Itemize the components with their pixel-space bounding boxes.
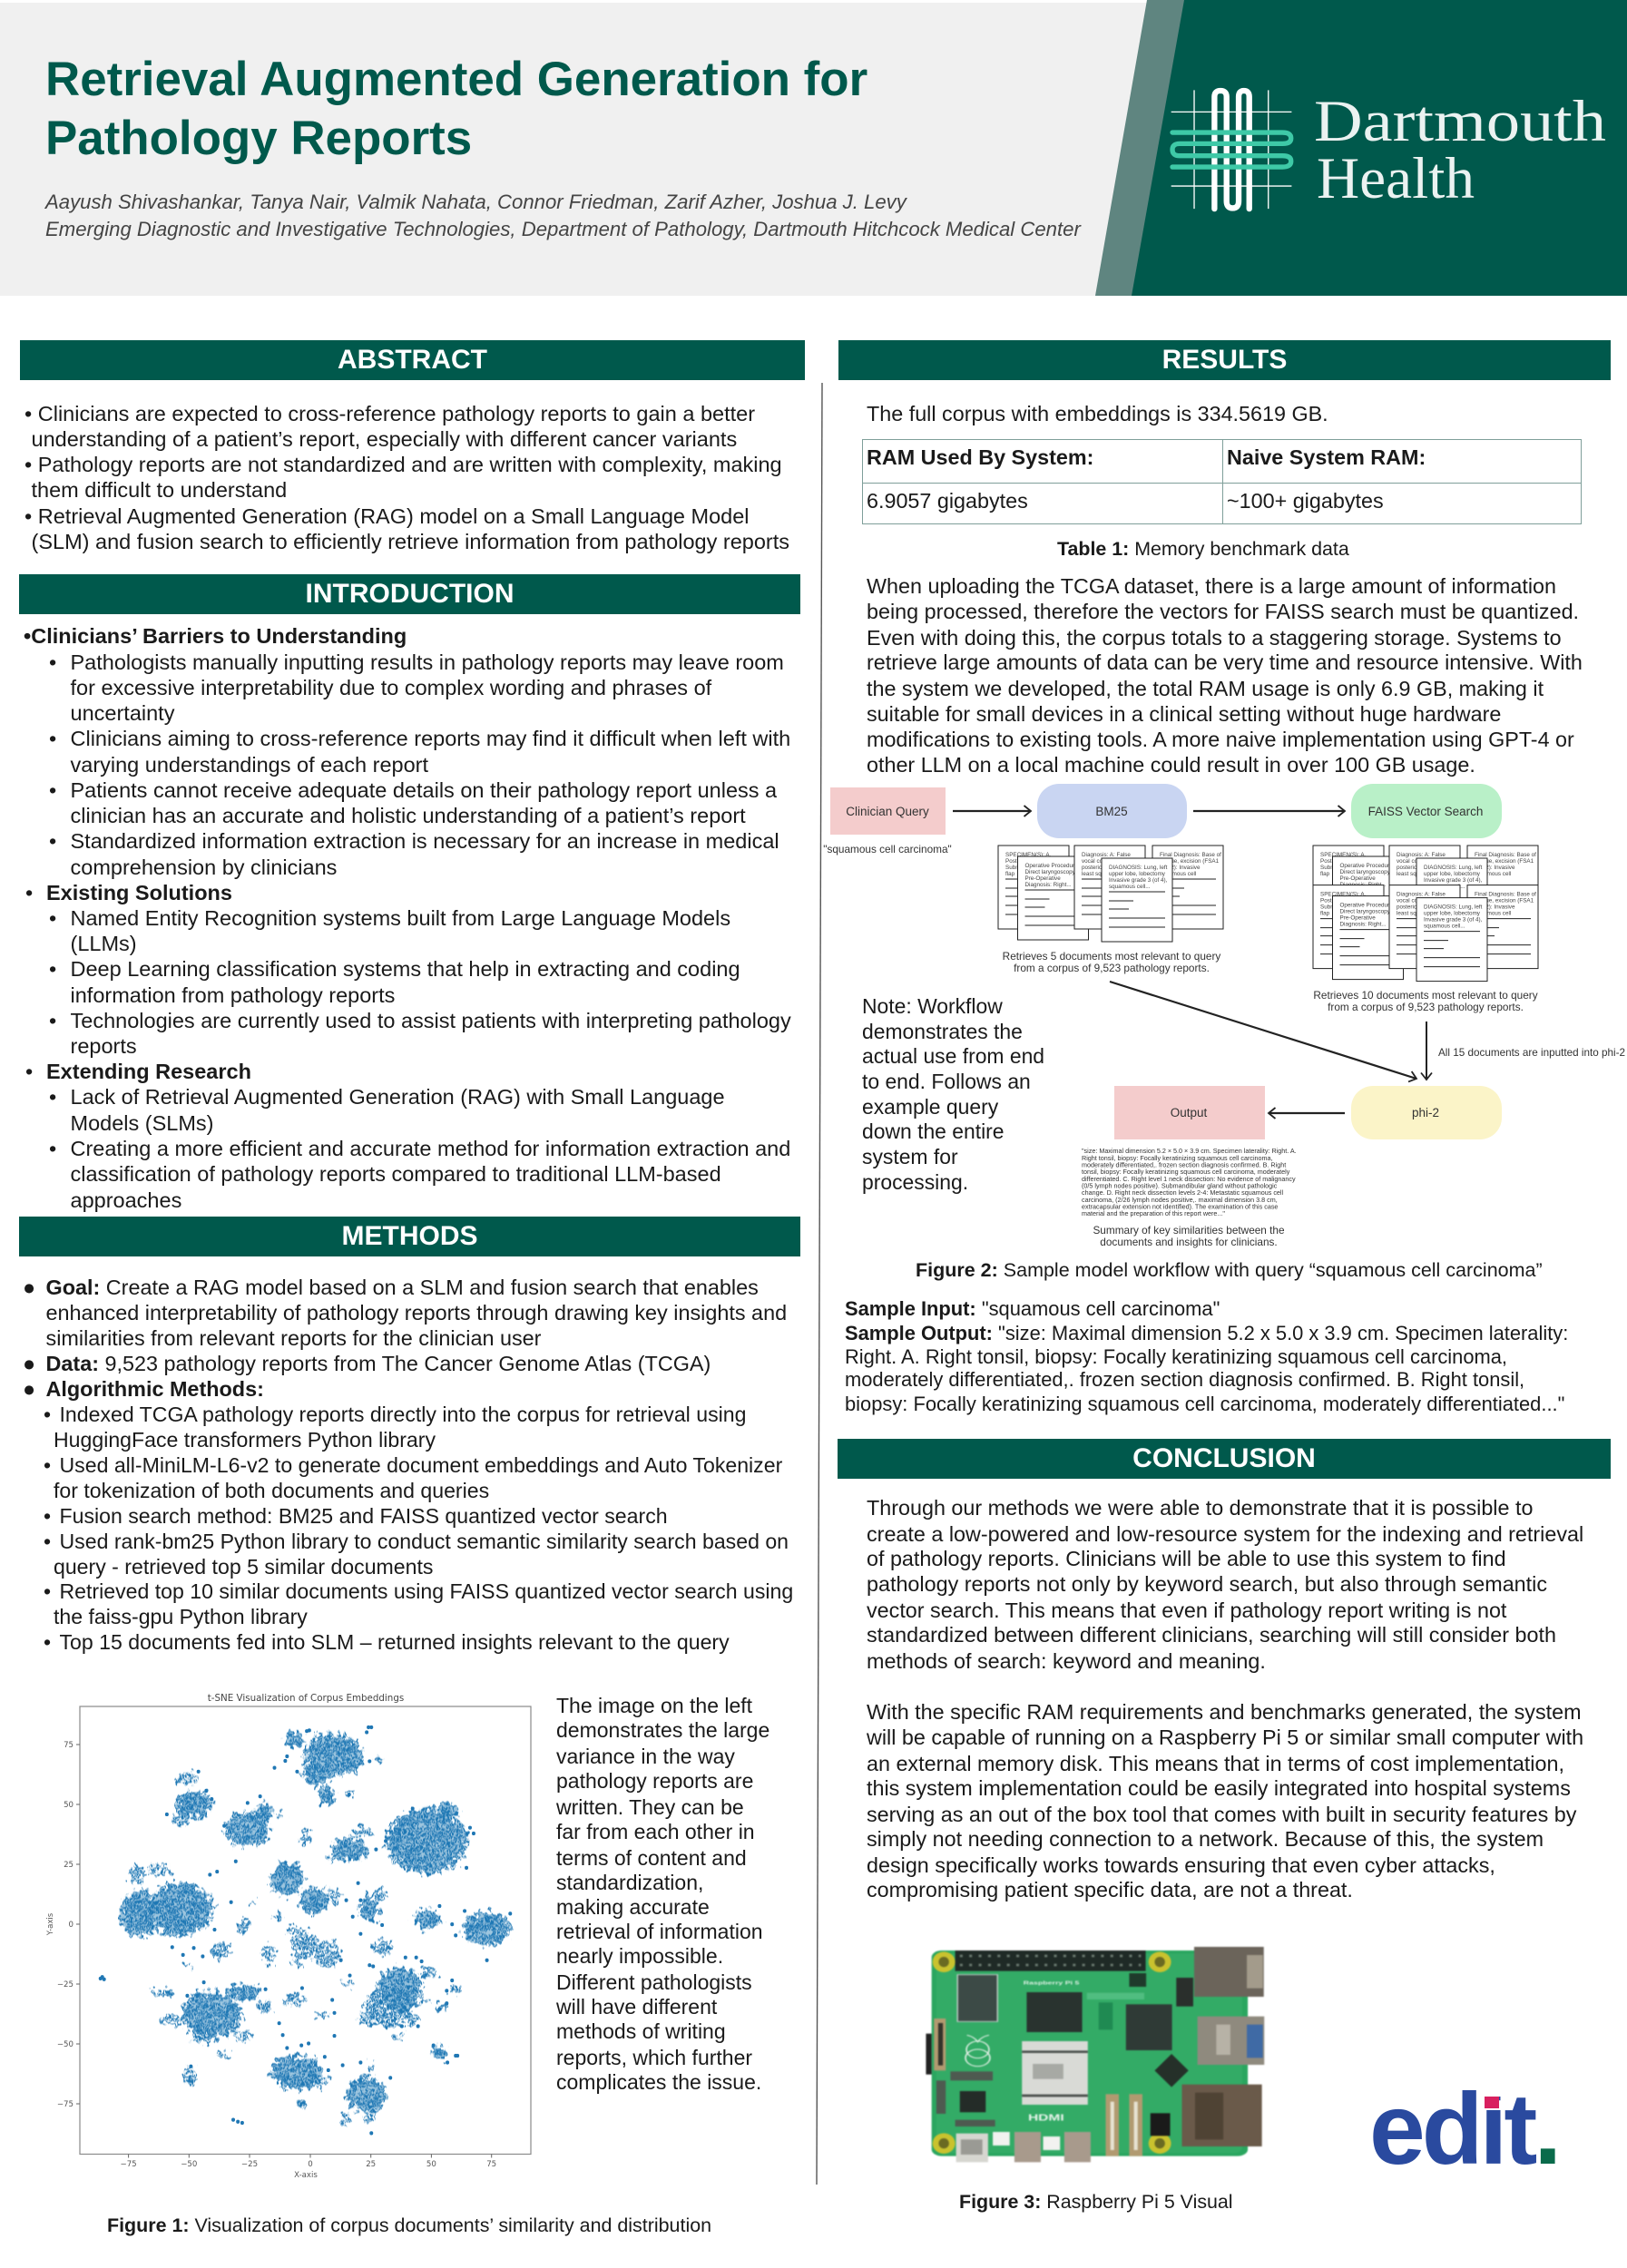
documents retrieved by BM25: DIAGNOSIS: Lung, left — [1109, 865, 1168, 871]
methods text: Indexed TCGA pathology reports directly into the corpus for retrieval using — [60, 1403, 746, 1426]
node: clinician query: Clinician Query — [846, 805, 929, 818]
documents retrieved by FAISS: squamous cell... — [1424, 924, 1465, 930]
documents retrieved by FAISS: squamous cell... — [1424, 884, 1465, 890]
arrow: phi-2 to output — [1269, 1112, 1345, 1114]
documents retrieved by FAISS: upper lobe, lobectomy — [1424, 871, 1481, 877]
introduction text — [24, 624, 791, 1212]
documents retrieved by FAISS: flap — [1320, 911, 1330, 917]
documents retrieved by FAISS: posterior, excision — [1397, 904, 1443, 911]
table caption: Table 1: Memory benchmark data — [1057, 538, 1349, 560]
documents retrieved by FAISS: Submandibular — [1320, 904, 1358, 911]
pink i-dot — [1485, 2097, 1499, 2108]
heading: results: RESULTS — [1162, 345, 1287, 375]
introduction text: Standardized information extraction is necessary for an increase in medical — [71, 829, 779, 853]
workflow note: demonstrates the — [862, 1020, 1023, 1043]
conclusion text: methods of search: keyword and meaning. — [867, 1649, 1266, 1673]
documents retrieved by FAISS: Operative Procedure: — [1339, 863, 1395, 869]
documents retrieved by FAISS: Diagnosis: Right... — [1339, 882, 1387, 888]
chart description text — [556, 1694, 769, 2094]
table header: naive RAM: Naive System RAM: — [1227, 445, 1426, 469]
documents retrieved by FAISS: squamous cell — [1475, 911, 1511, 917]
conclusion text: compromising patient specific data, are not a threat. — [867, 1878, 1353, 1901]
documents retrieved by BM25: flap — [1005, 871, 1015, 877]
node: output — [1114, 1086, 1265, 1139]
figure 1 caption: Figure 1: Visualization of corpus documents’ similarity and distribution — [107, 2214, 711, 2236]
introduction text: • — [49, 650, 56, 674]
axis labels: 50 — [426, 2160, 436, 2169]
introduction text: Pathologists manually inputting results in pathology reports may leave room — [71, 650, 784, 674]
methods text: • — [44, 1504, 51, 1528]
documents retrieved by BM25: Diagnosis: A: False — [1082, 852, 1131, 858]
white gap above i-dot — [1479, 2085, 1501, 2097]
documents retrieved by FAISS: SPECIMEN(S): A. — [1320, 852, 1367, 858]
USB-C and micro-HDMI ports — [956, 2134, 988, 2162]
documents retrieved by BM25: squamous cell... — [1109, 884, 1151, 890]
title — [45, 53, 867, 165]
image: Raspberry Pi 5 board — [925, 1946, 1265, 2163]
chart description text: nearly impossible. — [556, 1944, 723, 1968]
documents retrieved by FAISS: Posterior — [1320, 898, 1343, 904]
introduction text: uncertainty — [71, 701, 174, 725]
results paragraph — [867, 574, 1583, 777]
arrow: query to BM25 — [953, 810, 1031, 812]
documents retrieved by BM25: Invasive grade 3 (of 4), — [1109, 877, 1168, 884]
introduction text: approaches — [71, 1188, 181, 1212]
introduction text: Deep Learning classification systems that help in extracting and coding — [71, 957, 740, 981]
chart description text: reports, which further — [556, 2046, 752, 2069]
introduction text: • — [49, 1085, 56, 1109]
documents retrieved by BM25: least squamous — [1082, 871, 1122, 877]
introduction text: • — [49, 778, 56, 802]
heading: introduction — [19, 574, 800, 614]
output sample text: change. D. Right neck dissection levels 2-4: Metastatic squamous cell — [1082, 1188, 1284, 1197]
methods text: • — [44, 1453, 51, 1477]
methods text: • — [44, 1530, 51, 1553]
results paragraph: Even with doing this, the corpus totals to a staggering storage. Systems to — [867, 626, 1562, 650]
conclusion text: Through our methods we were able to demonstrate that it is possible to — [867, 1496, 1533, 1520]
documents retrieved by FAISS: Invasive grade 3 (of 4), — [1424, 877, 1483, 884]
heading: results — [838, 340, 1611, 380]
node: FAISS vector search — [1351, 784, 1502, 838]
chart description text: The image on the left — [556, 1694, 752, 1717]
workflow note: example query — [862, 1095, 998, 1119]
workflow note: down the entire — [862, 1119, 1005, 1143]
workflow note: to end. Follows an — [862, 1070, 1031, 1093]
scatter points — [101, 1727, 511, 2133]
chart description text: standardization, — [556, 1871, 703, 1894]
axis labels: −50 — [181, 2160, 197, 2169]
documents retrieved by FAISS: Invasive grade 3 (of 4), — [1424, 917, 1483, 924]
chart description text: complicates the issue. — [556, 2070, 761, 2094]
conclusion text: standardized between different clinicians, searching will still consider both — [867, 1623, 1556, 1647]
documents retrieved by FAISS: Final Diagnosis: Base of — [1475, 852, 1536, 858]
sample input and output: Sample Output: "size: Maximal dimension 5.2 x 5.0 x 3.9 cm. Specimen laterality: — [845, 1322, 1568, 1344]
conclusion text: an external memory disk. This means that in terms of cost implementation, — [867, 1752, 1564, 1775]
heading: abstract: ABSTRACT — [338, 345, 487, 375]
introduction text: classification of pathology reports compared to traditional LLM-based — [71, 1162, 721, 1186]
methods text: Retrieved top 10 similar documents using FAISS quantized vector search using — [60, 1579, 793, 1603]
axis labels: 50 — [64, 1801, 74, 1810]
results paragraph: being processed, therefore the vectors for FAISS search must be quantized. — [867, 600, 1579, 623]
workflow note: actual use from end — [862, 1044, 1044, 1068]
sample input and output: moderately differentiated,. frozen section diagnosis confirmed. B. Right tonsil, — [845, 1368, 1524, 1391]
introduction text: • — [25, 881, 33, 904]
methods text: query - retrieved top 5 similar documents — [54, 1555, 433, 1579]
chart description text: will have different — [556, 1995, 717, 2019]
axis labels: −50 — [57, 2040, 74, 2049]
conclusion text: create a low-powered and low-resource system for the indexing and retrieval — [867, 1522, 1583, 1546]
conclusion text: design specifically works towards ensuring that even cyber attacks, — [867, 1853, 1495, 1877]
table value: naive RAM: ~100+ gigabytes — [1227, 489, 1384, 513]
figure 3 caption: Figure 3: Raspberry Pi 5 Visual — [959, 2191, 1233, 2213]
abstract text: them difficult to understand — [31, 478, 287, 502]
output sample text: differentiated. C. Right level 1 neck dissection: No evidence of malignancy — [1082, 1175, 1296, 1183]
node: output: Output — [1171, 1106, 1208, 1119]
output sample text: material and the preparation of this report were..." — [1082, 1209, 1225, 1217]
output sample text: extracapsular extension not identified). The examination of this case — [1082, 1203, 1278, 1210]
documents retrieved by FAISS: Diagnosis: A: False — [1397, 852, 1446, 858]
chips — [957, 1975, 997, 2021]
chart description text: written. They can be — [556, 1795, 744, 1819]
abstract text: understanding of a patient’s report, especially with different cancer variants — [31, 427, 737, 451]
results paragraph: retrieve large amounts of data can be very time and resource intensive. With — [867, 650, 1583, 674]
conclusion text: simply not needing connection to a network. Because of this, the system — [867, 1827, 1544, 1851]
arrow label: All 15 documents are inputted into phi-2 — [1438, 1047, 1625, 1059]
axis labels: 25 — [64, 1861, 74, 1870]
documents retrieved by FAISS: Direct laryngoscopy; — [1339, 909, 1392, 915]
title: Pathology Reports — [45, 112, 472, 165]
introduction text: • — [25, 1060, 33, 1083]
methods text: Used all-MiniLM-L6-v2 to generate document embeddings and Auto Tokenizer — [60, 1453, 782, 1477]
introduction text: Existing Solutions — [46, 881, 232, 904]
documents retrieved by FAISS: Pre-Operative — [1339, 875, 1376, 882]
documents retrieved by BM25: posterior, excision — [1082, 865, 1128, 871]
documents retrieved by FAISS: Pre-Operative — [1339, 915, 1376, 922]
output sample text: Right tonsil, biopsy: Focally keratinizing squamous cell carcinoma, — [1082, 1154, 1273, 1162]
results paragraph: other LLM on a local machine could result in over 100 GB usage. — [867, 753, 1475, 777]
conclusion text — [867, 1496, 1583, 1901]
output sample text: (0/5 lymph nodes positive). Submandibular gland without pathologic — [1082, 1181, 1278, 1190]
documents retrieved by FAISS: Posterior — [1320, 858, 1343, 865]
introduction text: Extending Research — [46, 1060, 251, 1083]
methods text — [23, 1276, 793, 1654]
header banner — [0, 0, 1627, 296]
heading: introduction: INTRODUCTION — [305, 579, 514, 609]
chart description text: terms of content and — [556, 1846, 747, 1870]
documents retrieved by FAISS: upper lobe, lobectomy — [1424, 911, 1481, 917]
arrow: BM25 to phi-2 — [1110, 982, 1416, 1079]
sample input and output: Sample Input: "squamous cell carcinoma" — [845, 1297, 1220, 1320]
results paragraph: the system we developed, the total RAM usage is only 6.9 GB, making it — [867, 677, 1544, 700]
methods text: Algorithmic Methods: — [45, 1377, 264, 1401]
axis ticks — [76, 1745, 492, 2157]
heading: conclusion: CONCLUSION — [1132, 1443, 1316, 1473]
documents retrieved by FAISS: Diagnosis: A: False — [1397, 892, 1446, 898]
documents retrieved by FAISS: least squamous — [1397, 911, 1436, 917]
table header: RAM used: RAM Used By System: — [867, 445, 1093, 469]
documents retrieved by FAISS: Submandibular — [1320, 865, 1358, 871]
mounting holes — [933, 1951, 1171, 2154]
introduction text: varying understandings of each report — [71, 753, 428, 777]
image: Raspberry Pi 5 board: HDMI — [1028, 2112, 1064, 2123]
documents retrieved by FAISS: FSA2): Invasive — [1475, 904, 1515, 911]
table: memory benchmark — [862, 439, 1582, 524]
documents retrieved by FAISS: DIAGNOSIS: Lung, left — [1424, 904, 1483, 911]
methods text: enhanced interpretability of pathology reports through drawing key insights and — [45, 1301, 787, 1325]
node: BM25: BM25 — [1095, 805, 1128, 818]
documents retrieved by FAISS: tongue, excision (FSA1 — [1475, 898, 1534, 904]
sample input and output: biopsy: Focally keratinizing squamous cell carcinoma, moderately differentiated..." — [845, 1393, 1564, 1415]
documents retrieved by FAISS: vocal cord, left — [1397, 858, 1434, 865]
introduction text: •Clinicians’ Barriers to Understanding — [24, 624, 407, 648]
axis labels: Y-axis — [46, 1912, 55, 1936]
sample input and output — [845, 1297, 1568, 1415]
results intro sentence: The full corpus with embeddings is 334.5619 GB. — [867, 402, 1328, 425]
introduction text: information from pathology reports — [71, 983, 395, 1007]
axis labels: 75 — [64, 1741, 74, 1750]
abstract text: (SLM) and fusion search to efficiently retrieve information from pathology reports — [31, 530, 789, 553]
heading: conclusion — [838, 1439, 1611, 1479]
introduction text: Clinicians aiming to cross-reference reports may find it difficult when left with — [71, 727, 790, 750]
introduction text: • — [49, 1009, 56, 1032]
documents retrieved by FAISS: vocal cord, left — [1397, 898, 1434, 904]
documents retrieved by BM25: upper lobe, lobectomy — [1109, 871, 1166, 877]
introduction text: Technologies are currently used to assist patients with interpreting pathology — [71, 1009, 791, 1032]
axis labels: −75 — [57, 2100, 74, 2109]
methods text: ● — [23, 1276, 35, 1299]
documents retrieved by BM25: Posterior — [1005, 858, 1028, 865]
introduction text: (LLMs) — [71, 932, 137, 955]
introduction text: • — [49, 1137, 56, 1160]
methods text: Used rank-bm25 Python library to conduct semantic similarity search based on — [60, 1530, 789, 1553]
flat connectors — [934, 2019, 946, 2070]
introduction text: Lack of Retrieval Augmented Generation (RAG) with Small Language — [71, 1085, 725, 1109]
documents retrieved by BM25: Final Diagnosis: Base of — [1160, 852, 1221, 858]
BM25 retrieval caption: from a corpus of 9,523 pathology reports. — [1014, 962, 1210, 974]
RP1 silver shield — [1022, 2041, 1088, 2105]
conclusion text: With the specific RAM requirements and benchmarks generated, the system — [867, 1700, 1582, 1724]
authors and affiliation — [44, 191, 1082, 240]
methods text: • — [44, 1630, 51, 1654]
BM25 retrieval caption: Retrieves 5 documents most relevant to query — [1003, 950, 1220, 963]
introduction text: Creating a more efficient and accurate method for information extraction and — [71, 1137, 790, 1160]
conclusion text: pathology reports not only by keyword search, but also through semantic — [867, 1572, 1547, 1596]
output caption: documents and insights for clinicians. — [1100, 1236, 1278, 1248]
board — [932, 1950, 1248, 2156]
results paragraph: modifications to existing tools. A more naive implementation using GPT-4 or — [867, 728, 1574, 751]
board labels: Raspberry Pi 5 — [1024, 1980, 1079, 1986]
workflow note: system for — [862, 1145, 958, 1168]
methods text: Top 15 documents fed into SLM – returned insights relevant to the query — [60, 1630, 730, 1654]
heading: methods: METHODS — [341, 1221, 477, 1251]
introduction text: • — [49, 906, 56, 930]
table value: RAM used: 6.9057 gigabytes — [867, 489, 1028, 513]
methods text: HuggingFace transformers Python library — [54, 1428, 436, 1452]
workflow note: Note: Workflow — [862, 994, 1003, 1018]
abstract text: • Clinicians are expected to cross-reference pathology reports to gain a better — [25, 402, 755, 425]
introduction text: Models (SLMs) — [71, 1111, 214, 1135]
documents retrieved by BM25: SPECIMEN(S): A. — [1005, 852, 1052, 858]
documents retrieved by FAISS: flap — [1320, 871, 1330, 877]
node: BM25 — [1037, 784, 1187, 838]
axis labels: X-axis — [294, 2171, 318, 2180]
documents retrieved by BM25: tongue, excision (FSA1 — [1160, 858, 1220, 865]
FAISS retrieval caption: from a corpus of 9,523 pathology reports. — [1328, 1001, 1524, 1013]
documents retrieved by BM25: FSA2): Invasive — [1160, 865, 1201, 871]
sample input and output: Right. A. Right tonsil, biopsy: Focally keratinizing squamous cell carcinoma, — [845, 1345, 1507, 1368]
FAISS retrieval caption: Retrieves 10 documents most relevant to query — [1313, 989, 1538, 1002]
documents retrieved by BM25: Submandibular — [1005, 865, 1044, 871]
methods text: ● — [23, 1352, 35, 1375]
logo: Dartmouth Health: Health — [1317, 146, 1475, 211]
methods text: the faiss-gpu Python library — [54, 1605, 308, 1628]
conclusion text: will be capable of running on a Raspberry Pi 5 or similar small computer with — [867, 1725, 1583, 1749]
conclusion text: vector search. This means that even if pathology report writing is not — [867, 1598, 1506, 1622]
axis labels — [46, 1741, 496, 2180]
column divider — [816, 383, 823, 2185]
abstract text: • Pathology reports are not standardized and are written with complexity, making — [25, 453, 782, 476]
methods text: • — [44, 1403, 51, 1426]
logo: Dartmouth Health: Dartmouth — [1314, 89, 1606, 154]
arrow: BM25 to FAISS — [1193, 810, 1345, 812]
node: phi-2 — [1351, 1086, 1502, 1139]
introduction text: clinician has an accurate and holistic understanding of a patient’s report — [71, 804, 746, 827]
chart title: t-SNE Visualization of Corpus Embeddings — [208, 1693, 404, 1704]
axis labels: 75 — [486, 2160, 496, 2169]
documents retrieved by BM25: Direct laryngoscopy; — [1025, 869, 1077, 875]
introduction text: • — [49, 957, 56, 981]
documents retrieved by BM25: squamous cell — [1160, 871, 1196, 877]
workflow note — [862, 994, 1044, 1194]
conclusion text: this system implementation could be easily integrated into hospital systems — [867, 1776, 1571, 1800]
authors and affiliation: Aayush Shivashankar, Tanya Nair, Valmik Nahata, Connor Friedman, Zarif Azher, Joshua J. Levy — [45, 191, 907, 213]
documents retrieved by BM25: Pre-Operative — [1025, 875, 1061, 882]
documents retrieved by BM25: Operative Procedure: — [1025, 863, 1080, 869]
figure 2 caption: Figure 2: Sample model workflow with query “squamous cell carcinoma” — [916, 1259, 1543, 1281]
chart description text: demonstrates the large — [556, 1718, 769, 1742]
documents retrieved by FAISS — [1313, 846, 1538, 982]
table row lines — [863, 483, 1581, 484]
documents retrieved by FAISS: FSA2): Invasive — [1475, 865, 1515, 871]
results paragraph: When uploading the TCGA dataset, there is a large amount of information — [867, 574, 1556, 598]
authors and affiliation: Emerging Diagnostic and Investigative Technologies, Department of Pathology, Dartmouth Hitchcock Medical Center — [45, 218, 1081, 240]
methods text: Goal: Create a RAG model based on a SLM and fusion search that enables — [45, 1276, 759, 1299]
abstract text: • Retrieval Augmented Generation (RAG) model on a Small Language Model — [25, 504, 750, 528]
introduction text: for excessive interpretability due to complex wording and phrases of — [71, 676, 711, 699]
output sample text: "size: Maximal dimension 5.2 × 5.0 × 3.9 cm. Specimen laterality: Right. A. — [1082, 1147, 1297, 1155]
axis labels: −75 — [121, 2160, 137, 2169]
header background — [0, 0, 1627, 296]
documents retrieved by BM25: vocal cord, left — [1082, 858, 1119, 865]
GPIO header — [956, 1950, 1146, 1971]
axis labels: 25 — [366, 2160, 376, 2169]
documents retrieved by FAISS: Operative Procedure: — [1339, 903, 1395, 909]
results paragraph: suitable for small devices in a clinical setting without huge hardware — [867, 702, 1501, 726]
workflow note: processing. — [862, 1170, 968, 1194]
chart: t-SNE scatter plot — [46, 1693, 532, 2180]
node: phi-2: phi-2 — [1412, 1106, 1439, 1119]
chart description text: variance in the way — [556, 1745, 735, 1768]
methods text: ● — [23, 1377, 35, 1401]
workflow diagram — [823, 784, 1625, 1248]
output sample text: tonsil, biopsy: Focally keratinizing squamous cell carcinoma, moderately — [1082, 1168, 1290, 1176]
documents retrieved by FAISS: Diagnosis: Right... — [1339, 922, 1387, 928]
title: Retrieval Augmented Generation for — [45, 53, 867, 106]
introduction text: Named Entity Recognition systems built from Large Language Models — [71, 906, 730, 930]
documents retrieved by FAISS: SPECIMEN(S): A. — [1320, 892, 1367, 898]
axis labels: 0 — [69, 1921, 74, 1930]
introduction text: comprehension by clinicians — [71, 855, 337, 879]
chart description text: pathology reports are — [556, 1769, 753, 1793]
heading: methods — [19, 1217, 800, 1256]
documents retrieved by FAISS: tongue, excision (FSA1 — [1475, 858, 1534, 865]
chart description text: far from each other in — [556, 1820, 755, 1843]
arrow: FAISS to phi-2 — [1426, 1022, 1427, 1080]
small components — [936, 2071, 995, 2126]
query label: "squamous cell carcinoma" — [823, 843, 952, 855]
conclusion text: of pathology reports. Clinicians will be able to use this system to find — [867, 1547, 1506, 1570]
raspberry logo — [965, 2035, 990, 2067]
documents retrieved by FAISS: posterior, excision — [1397, 865, 1443, 871]
isolated points — [101, 1727, 510, 2133]
documents retrieved by BM25: Diagnosis: Right... — [1025, 882, 1072, 888]
introduction text: • — [49, 727, 56, 750]
output caption: Summary of key similarities between the — [1093, 1224, 1285, 1237]
methods text: • — [44, 1579, 51, 1603]
node: FAISS vector search: FAISS Vector Search — [1368, 805, 1483, 818]
conclusion text: serving as an out of the box tool that comes with built in security features by — [867, 1803, 1576, 1826]
abstract text — [25, 402, 789, 553]
documents retrieved by FAISS: Direct laryngoscopy; — [1339, 869, 1392, 875]
axis labels: −25 — [57, 1980, 74, 1989]
methods text: for tokenization of both documents and queries — [54, 1479, 489, 1502]
chart description text: methods of writing — [556, 2019, 726, 2043]
axis labels: 0 — [308, 2160, 313, 2169]
heading: abstract — [20, 340, 805, 380]
methods text: similarities from relevant reports for the clinician user — [45, 1326, 541, 1350]
introduction text: reports — [71, 1034, 137, 1058]
logo: edit.: edit. — [1369, 2073, 1558, 2185]
logo: Dartmouth Health — [1170, 87, 1606, 212]
documents retrieved by FAISS: Final Diagnosis: Base of — [1475, 892, 1536, 898]
chart description text: retrieval of information — [556, 1920, 763, 1943]
axis labels: −25 — [241, 2160, 258, 2169]
methods text: Data: 9,523 pathology reports from The Cancer Genome Atlas (TCGA) — [45, 1352, 711, 1375]
output sample text: moderately differentiated,. frozen section diagnosis confirmed. B. Right — [1082, 1161, 1286, 1168]
methods text: Fusion search method: BM25 and FAISS quantized vector search — [60, 1504, 668, 1528]
table column line — [1222, 440, 1223, 523]
introduction text: Patients cannot receive adequate details on their pathology report unless a — [71, 778, 777, 802]
introduction text: • — [49, 829, 56, 853]
plot frame — [80, 1706, 531, 2154]
chart description text: making accurate — [556, 1895, 710, 1919]
documents retrieved by FAISS: squamous cell — [1475, 871, 1511, 877]
chart description text: Different pathologists — [556, 1970, 752, 1994]
ethernet and USB ports — [1194, 1947, 1264, 1997]
node: clinician query — [830, 787, 946, 835]
documents retrieved by FAISS: DIAGNOSIS: Lung, left — [1424, 865, 1483, 871]
documents retrieved by BM25 — [998, 846, 1223, 942]
documents retrieved by FAISS: least squamous — [1397, 871, 1436, 877]
output sample text: carcinoma, (2/26 lymph nodes positive,. maximal dimension 3.8 cm, — [1082, 1196, 1278, 1204]
